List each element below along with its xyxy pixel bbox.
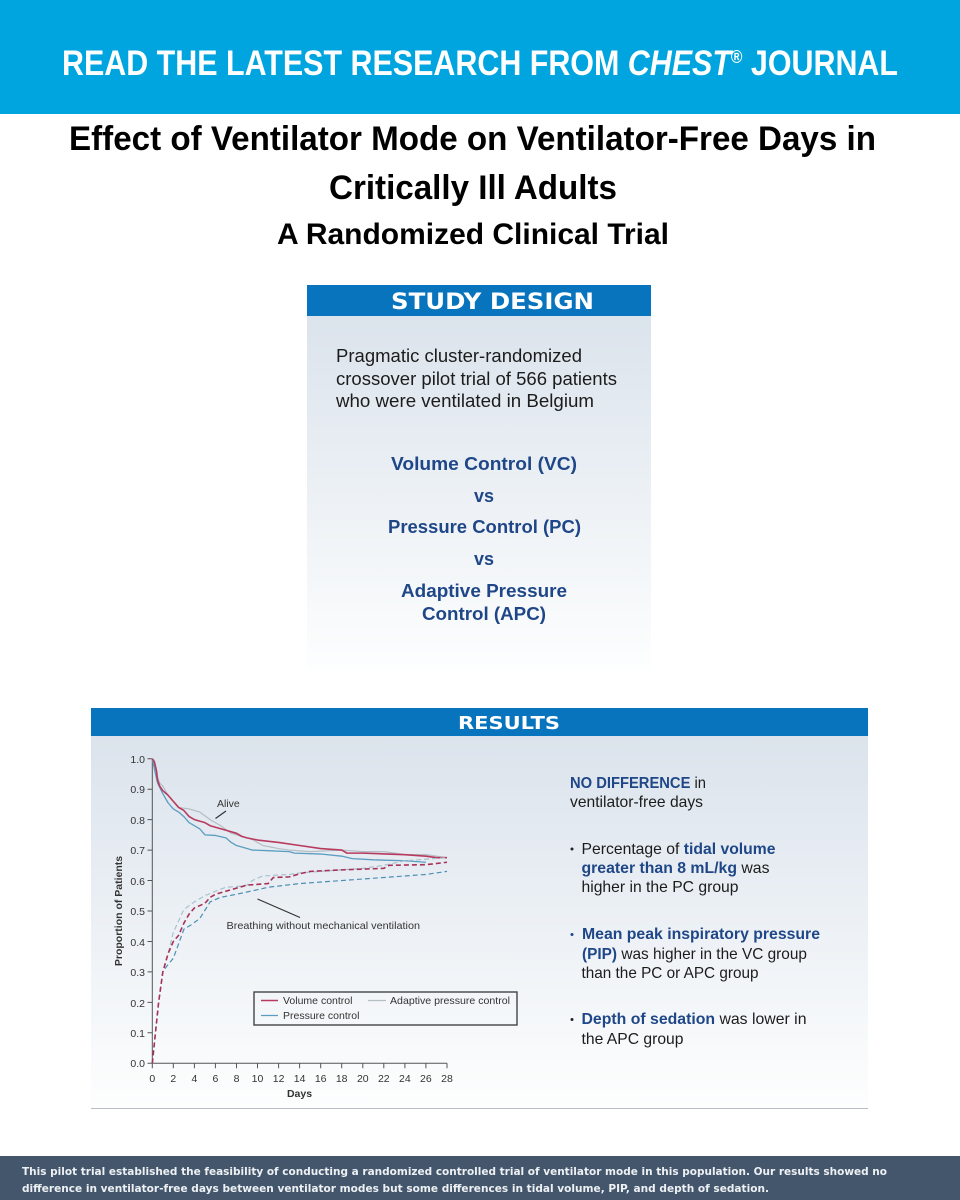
finding: peak inspiratory pressure: Mean peak inspiratory pressure	[582, 926, 820, 943]
title: Effect of Ventilator Mode on Ventilator-Free Days in	[69, 120, 876, 158]
banner headline: JOURNAL	[742, 44, 898, 83]
panel: study design	[307, 285, 651, 670]
x axis labels: 8	[234, 1073, 240, 1085]
y axis labels: 1.0	[130, 754, 145, 766]
comparison arms: Control (APC)	[422, 604, 546, 624]
comparison arms: vs	[474, 486, 494, 506]
finding: depth of sedation: the APC group	[582, 1031, 684, 1048]
y axis labels: 0.3	[130, 967, 145, 979]
results heading: RESULTS	[458, 713, 560, 734]
study description: who were ventilated in Belgium	[335, 391, 594, 411]
x axis title: Days	[287, 1088, 312, 1100]
panel: results	[91, 708, 868, 1109]
y axis labels: 0.7	[130, 845, 145, 857]
y axis labels: 0.9	[130, 784, 145, 796]
comparison arms: Pressure Control (PC)	[388, 517, 581, 537]
x axis labels: 6	[212, 1073, 218, 1085]
finding: tidal volume: greater than 8 mL/kg was	[582, 860, 770, 877]
finding: depth of sedation	[570, 1011, 806, 1048]
finding: no difference	[570, 775, 706, 811]
finding: peak inspiratory pressure: than the PC or APC group	[582, 965, 759, 982]
x axis labels: 28	[441, 1073, 453, 1085]
title: Critically Ill Adults	[329, 169, 617, 207]
x axis labels	[149, 1073, 453, 1085]
y axis labels: 0.4	[130, 937, 145, 949]
x axis labels: 22	[378, 1073, 390, 1085]
annotation: breathing without mechanical ventilation: Breathing without mechanical ventilation	[226, 920, 420, 932]
finding: depth of sedation: Depth of sedation was lower in	[582, 1011, 806, 1028]
x axis labels: 24	[399, 1073, 411, 1085]
finding: tidal volume: Percentage of tidal volume	[582, 841, 776, 858]
pressure control curve: breathing	[152, 871, 447, 1063]
study description: crossover pilot trial of 566 patients	[336, 369, 617, 389]
y axis labels	[130, 754, 145, 1070]
legend: Adaptive pressure control	[390, 995, 510, 1007]
comparison arms: Volume Control (VC)	[391, 454, 577, 474]
finding: tidal volume: higher in the PC group	[582, 879, 739, 896]
banner headline: ®	[731, 47, 742, 67]
comparison arms: Adaptive Pressure	[401, 581, 567, 601]
legend	[254, 992, 517, 1025]
x axis labels: 0	[149, 1073, 155, 1085]
comparison arms	[388, 454, 581, 624]
subtitle: A Randomized Clinical Trial	[277, 218, 669, 251]
study description: Pragmatic cluster-randomized	[336, 346, 582, 366]
title	[69, 120, 876, 251]
results findings text	[570, 775, 820, 1048]
study design heading: STUDY DESIGN	[391, 290, 594, 315]
finding: peak inspiratory pressure: (PIP) was higher in the VC group	[582, 946, 807, 963]
pressure control curve: alive	[152, 759, 426, 862]
finding: peak inspiratory pressure	[570, 926, 820, 982]
data curves	[152, 759, 447, 1063]
adaptive pressure control curve: breathing	[152, 858, 447, 1063]
annotation: alive	[216, 798, 240, 818]
y axis labels: 0.0	[130, 1058, 145, 1070]
x axis labels: 10	[252, 1073, 263, 1085]
x axis labels: 12	[273, 1073, 285, 1085]
x axis labels: 16	[315, 1073, 327, 1085]
legend: Volume control	[283, 995, 352, 1007]
axes	[148, 759, 447, 1068]
x axis labels: 4	[191, 1073, 197, 1085]
x axis labels: 26	[420, 1073, 432, 1085]
finding: no difference: ventilator-free days	[570, 794, 703, 811]
x axis labels: 20	[357, 1073, 369, 1085]
legend: Pressure control	[283, 1010, 359, 1022]
annotation: alive: Alive	[217, 798, 240, 810]
y axis labels: 0.8	[130, 815, 145, 827]
header banner	[0, 0, 960, 114]
y axis title: Proportion of Patients	[113, 856, 125, 966]
x axis labels: 18	[336, 1073, 348, 1085]
y axis labels: 0.1	[130, 1028, 145, 1040]
conclusion text	[22, 1166, 887, 1195]
y axis labels: 0.5	[130, 906, 145, 918]
volume control curve: alive	[152, 759, 447, 858]
x axis labels: 14	[294, 1073, 306, 1085]
conclusion text: This pilot trial established the feasibility of conducting a randomized controlled trial of ventilator mode in this population. Our results showed no	[22, 1166, 887, 1178]
finding: tidal volume	[570, 841, 776, 896]
comparison arms: vs	[474, 549, 494, 569]
chart: proportion of patients over days	[113, 754, 517, 1100]
footer conclusion	[0, 1156, 960, 1200]
x axis labels: 2	[170, 1073, 176, 1085]
y axis labels: 0.6	[130, 876, 145, 888]
conclusion text: difference in ventilator-free days between ventilator modes but some differences in tidal volume, PIP, and depth of sedation.	[22, 1183, 769, 1195]
y axis labels: 0.2	[130, 998, 145, 1010]
finding: no difference: NO DIFFERENCE in	[570, 775, 706, 792]
volume control curve: breathing	[152, 862, 447, 1063]
banner headline: READ THE LATEST RESEARCH FROM CHEST	[62, 44, 746, 83]
study description	[335, 346, 617, 411]
annotation: breathing without mechanical ventilation	[226, 899, 420, 932]
adaptive pressure control curve: alive	[152, 759, 447, 858]
